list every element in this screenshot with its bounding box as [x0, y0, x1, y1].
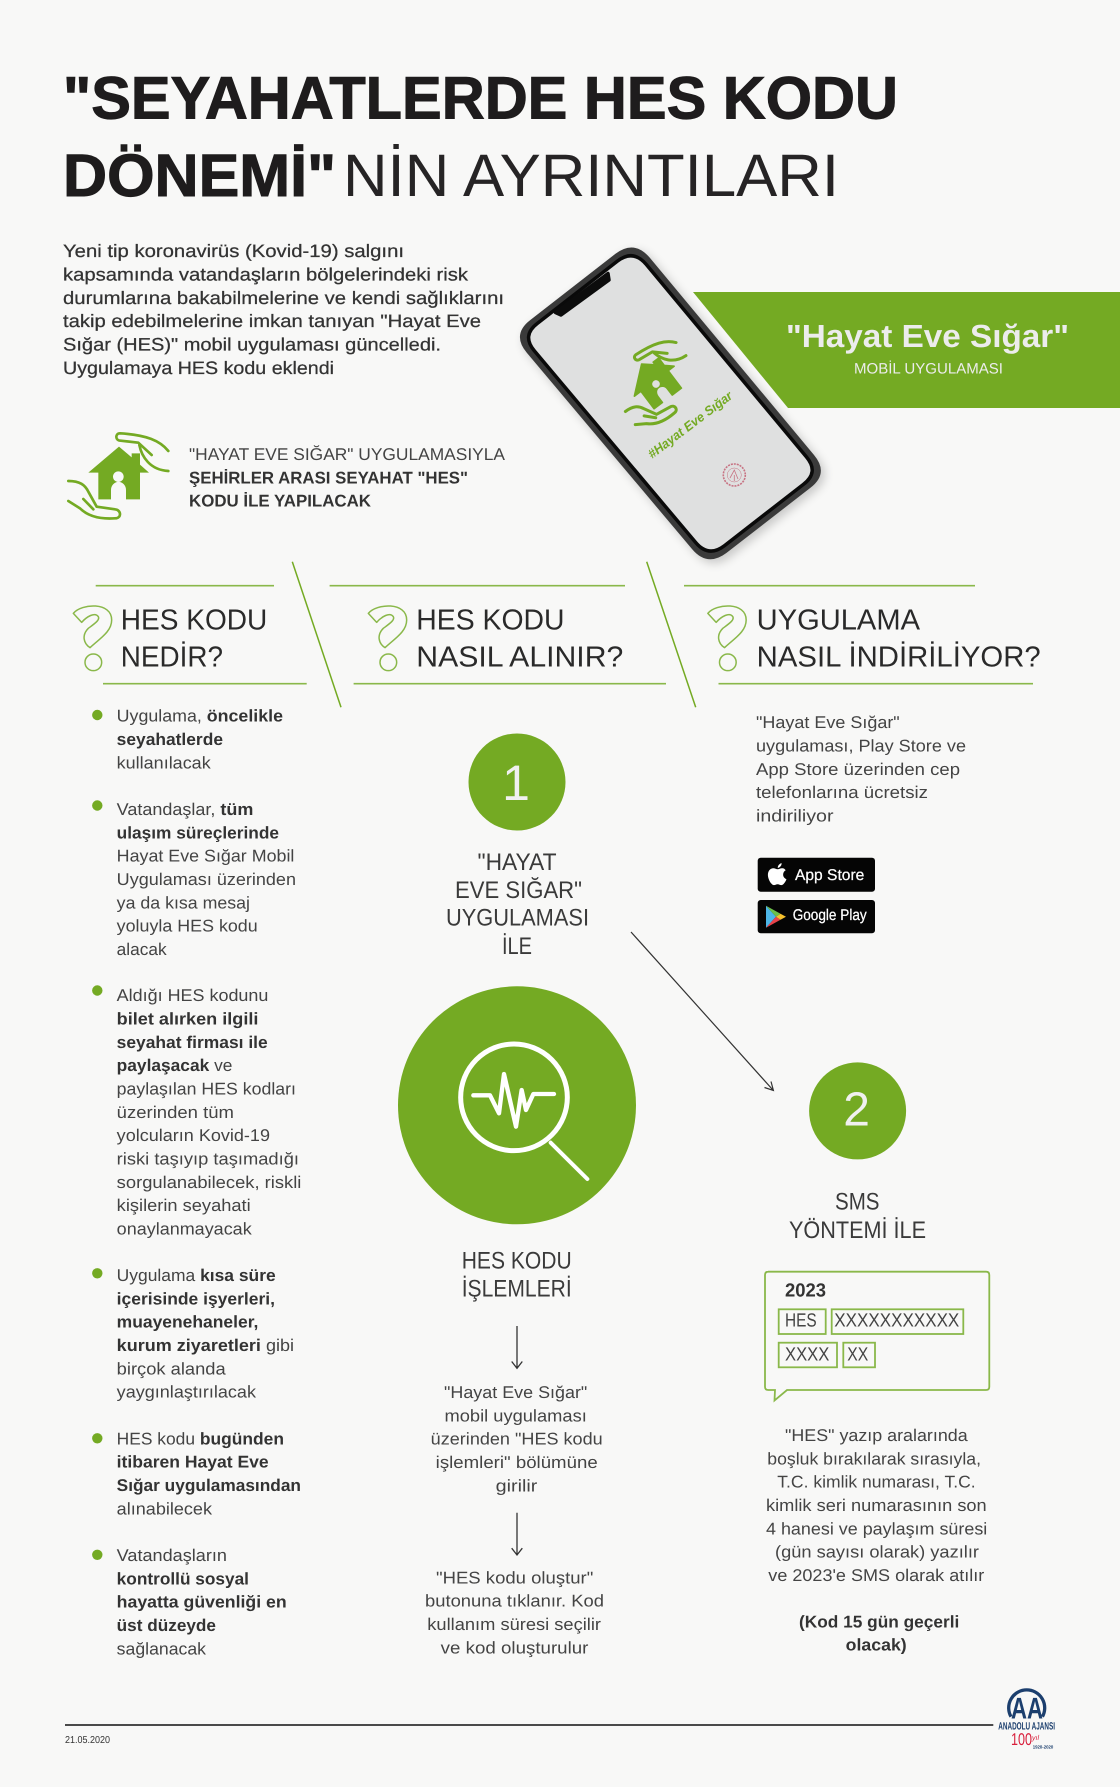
- bullet 3: üzerinden tüm: [117, 1103, 234, 1122]
- bullet 2: yoluyla HES kodu: [117, 917, 258, 936]
- bullet 1: Uygulama, öncelikle: [117, 707, 283, 726]
- SMS instructions: T.C. kimlik numarası, T.C.: [777, 1473, 976, 1492]
- divider slash 2: [647, 562, 696, 707]
- title: DÖNEMİ": [63, 142, 336, 209]
- bullet 6: kontrollü sosyal: [117, 1569, 249, 1588]
- SMS instructions: boşluk bırakılarak sırasıyla,: [767, 1449, 981, 1468]
- step 1 label: [446, 849, 589, 960]
- step 2 label: [789, 1189, 926, 1244]
- title: NİN AYRINTILARI: [343, 142, 839, 209]
- bullet 1: seyahatlerde: [117, 730, 223, 749]
- step text: hes kodu olustur: "HES kodu oluştur": [436, 1568, 593, 1587]
- bullet 4: Uygulama kısa süre: [117, 1266, 276, 1285]
- subheading: "HAYAT EVE SIĞAR" UYGULAMASIYLA: [189, 445, 506, 464]
- google play button: [758, 900, 875, 933]
- bullet 4: birçok alanda: [117, 1359, 226, 1378]
- download text: App Store üzerinden cep: [756, 760, 960, 779]
- intro text: kapsamında vatandaşların bölgelerindeki risk: [63, 264, 469, 284]
- icon: house in hands: [68, 433, 168, 519]
- ministry seal: [723, 464, 745, 486]
- bullet 3: [92, 985, 301, 1238]
- intro text: [63, 241, 504, 378]
- subheading: [189, 445, 506, 510]
- arrow down 1: [512, 1326, 522, 1368]
- bullet 6: sağlanacak: [117, 1639, 207, 1658]
- SMS instructions: ve 2023'e SMS olarak atılır: [768, 1566, 985, 1585]
- bullet 6: hayatta güvenliği en: [117, 1593, 287, 1612]
- bullet 4: yaygınlaştırılacak: [117, 1383, 257, 1402]
- arrow down 2: [512, 1513, 522, 1555]
- icon: question mark: [73, 606, 112, 671]
- Anadolu Ajansi logo: yıl: [1031, 1734, 1039, 1742]
- step text: hes kodu olustur: butonuna tıklanır. Kod: [425, 1592, 604, 1611]
- step text: hes kodu olustur: ve kod oluşturulur: [441, 1638, 589, 1657]
- subheading: KODU İLE YAPILACAK: [189, 492, 372, 510]
- bullet 1: [92, 707, 283, 772]
- bullet 2: Vatandaşlar, tüm: [117, 800, 253, 819]
- bullet 2: alacak: [117, 940, 167, 959]
- step 2 badge: 2: [843, 1084, 870, 1136]
- icon: magnifier with pulse: [398, 986, 636, 1224]
- header: HES kodu nedir: HES KODU: [121, 604, 267, 636]
- step text: hes kodu islemleri: "Hayat Eve Sığar": [444, 1383, 587, 1402]
- bullet list: HES kodu nedir: [92, 707, 301, 1658]
- intro text: takip edebilmelerine imkan tanıyan "Hayat Eve: [63, 311, 481, 331]
- step text: hes kodu olustur: [425, 1568, 604, 1657]
- step text: hes kodu islemleri: işlemleri" bölümüne: [436, 1453, 598, 1472]
- bullet 1: kullanılacak: [117, 753, 211, 772]
- bullet 3: sorgulanabilecek, riskli: [117, 1173, 301, 1192]
- date: 21.05.2020: [65, 1735, 110, 1746]
- header: HES kodu nasil alinir: HES KODU: [416, 604, 564, 636]
- phone mockup: [520, 248, 824, 563]
- bullet 5: itibaren Hayat Eve: [117, 1453, 269, 1472]
- SMS message box: XX: [847, 1345, 869, 1366]
- bullet 2: Uygulaması üzerinden: [117, 870, 296, 889]
- Anadolu Ajansi logo: ANADOLU AJANSI: [998, 1720, 1055, 1732]
- header: uygulama nasil indiriliyor: [684, 586, 1041, 684]
- header: HES kodu nasil alinir: [330, 586, 666, 684]
- subheading: ŞEHİRLER ARASI SEYAHAT "HES": [189, 469, 468, 488]
- green banner: MOBİL UYGULAMASI: [854, 360, 1003, 378]
- step text: hes kodu islemleri: [431, 1383, 603, 1495]
- step 1 label: UYGULAMASI: [446, 904, 589, 932]
- bullet 3: kişilerin seyahati: [117, 1196, 251, 1215]
- Anadolu Ajansi logo: 100: [1011, 1730, 1032, 1749]
- SMS message box: HES: [785, 1311, 817, 1332]
- bullet 5: Sığar uygulamasından: [117, 1476, 301, 1495]
- SMS message box: XXXXXXXXXXX: [834, 1311, 960, 1332]
- step 1 badge: [468, 734, 566, 830]
- SMS instructions: 4 hanesi ve paylaşım süresi: [766, 1519, 987, 1538]
- SMS instructions: [766, 1426, 987, 1585]
- step 2 label: SMS: [835, 1189, 880, 1216]
- bullet 2: Hayat Eve Sığar Mobil: [117, 847, 294, 866]
- bullet 3: paylaşılan HES kodları: [117, 1080, 296, 1098]
- bullet 3: Aldığı HES kodunu: [117, 986, 268, 1005]
- intro text: Uygulamaya HES kodu eklendi: [63, 358, 334, 378]
- SMS instructions: kimlik seri numarasının son: [766, 1496, 987, 1515]
- Anadolu Ajansi logo: 1920-2020: [1033, 1744, 1054, 1749]
- SMS instructions: (gün sayısı olarak) yazılır: [775, 1543, 979, 1562]
- step text: hes kodu islemleri: girilir: [496, 1476, 538, 1495]
- bullet 4: içerisinde işyerleri,: [117, 1289, 275, 1308]
- bullet 3: bilet alırken ilgili: [117, 1010, 258, 1028]
- diagonal arrow: [631, 932, 773, 1090]
- divider slash 1: [292, 562, 341, 707]
- bullet 2: ulaşım süreçlerinde: [117, 823, 279, 842]
- bullet 2: ya da kısa mesaj: [117, 893, 250, 912]
- bullet 4: kurum ziyaretleri gibi: [117, 1336, 294, 1355]
- header: HES kodu nedir: [73, 586, 307, 684]
- validity note: [799, 1612, 959, 1655]
- bullet 3: riski taşıyıp taşımadığı: [117, 1150, 299, 1168]
- validity note: olacak): [846, 1636, 907, 1655]
- SMS message box: XXXX: [785, 1345, 830, 1366]
- SMS message box: [765, 1272, 989, 1400]
- app store button: [758, 858, 875, 892]
- bullet 6: [92, 1546, 287, 1658]
- SMS instructions: "HES" yazıp aralarında: [785, 1426, 968, 1445]
- Anadolu Ajansi logo: [998, 1690, 1055, 1749]
- header: uygulama nasil indiriliyor: UYGULAMA: [757, 604, 921, 636]
- step 1 label: "HAYAT: [478, 849, 557, 876]
- bullet 3: seyahat firması ile: [117, 1033, 268, 1052]
- bullet 3: onaylanmayacak: [117, 1220, 252, 1238]
- bullet 2: [92, 800, 296, 959]
- intro text: Yeni tip koronavirüs (Kovid-19) salgını: [63, 241, 404, 261]
- bullet 4: muayenehaneler,: [117, 1313, 258, 1332]
- HES kodu islemleri label: [462, 1247, 572, 1303]
- HES kodu islemleri label: İŞLEMLERİ: [462, 1276, 572, 1303]
- download text: "Hayat Eve Sığar": [756, 713, 900, 732]
- validity note: (Kod 15 gün geçerli: [799, 1612, 959, 1631]
- bullet 6: Vatandaşların: [117, 1546, 227, 1565]
- phone app logo: [602, 331, 709, 436]
- download text: [756, 713, 966, 826]
- phone hashtag: #Hayat Eve Sığar: [645, 387, 736, 461]
- SMS message box: 2023: [785, 1281, 826, 1302]
- step 1 label: EVE SIĞAR": [455, 877, 582, 904]
- bullet 6: üst düzeyde: [117, 1616, 216, 1635]
- bullet 5: HES kodu bugünden: [117, 1429, 284, 1448]
- title: "SEYAHATLERDE HES KODU: [63, 64, 898, 132]
- green banner: [693, 292, 1120, 408]
- phone notch: [556, 274, 609, 315]
- icon: question mark: [368, 606, 407, 671]
- intro text: Sığar (HES)" mobil uygulaması güncelledi.: [63, 334, 441, 354]
- bullet 3: yolcuların Kovid-19: [117, 1126, 270, 1145]
- app store button: App Store: [795, 867, 864, 884]
- header: HES kodu nasil alinir: NASIL ALINIR?: [416, 642, 623, 674]
- header: uygulama nasil indiriliyor: NASIL İNDİRİLİYOR?: [757, 641, 1041, 674]
- HES kodu islemleri label: HES KODU: [462, 1247, 572, 1274]
- step text: hes kodu islemleri: mobil uygulaması: [444, 1406, 587, 1425]
- download text: indiriliyor: [756, 806, 834, 826]
- bullet 3: paylaşacak ve: [117, 1056, 232, 1075]
- google play button: Google Play: [793, 907, 867, 924]
- title: [63, 64, 898, 209]
- step 2 badge: [809, 1062, 906, 1159]
- download text: telefonlarına ücretsiz: [756, 783, 928, 802]
- step text: hes kodu islemleri: üzerinden "HES kodu: [431, 1430, 603, 1449]
- download text: uygulaması, Play Store ve: [756, 736, 966, 756]
- bullet 5: [92, 1429, 301, 1518]
- bullet 4: [92, 1266, 294, 1402]
- green banner: "Hayat Eve Sığar": [786, 318, 1069, 354]
- Anadolu Ajansi logo: AA: [1011, 1692, 1043, 1725]
- footer rule: [65, 1724, 993, 1726]
- step 1 badge: 1: [502, 755, 530, 811]
- bullet 5: alınabilecek: [117, 1499, 213, 1518]
- step text: hes kodu olustur: kullanım süresi seçilir: [427, 1615, 601, 1634]
- step 2 label: YÖNTEMİ İLE: [789, 1217, 926, 1244]
- header: HES kodu nedir: NEDİR?: [121, 641, 223, 674]
- step 1 label: İLE: [502, 933, 532, 960]
- intro text: durumlarına bakabilmelerine ve kendi sağlıklarını: [63, 288, 504, 308]
- icon: question mark: [708, 606, 746, 671]
